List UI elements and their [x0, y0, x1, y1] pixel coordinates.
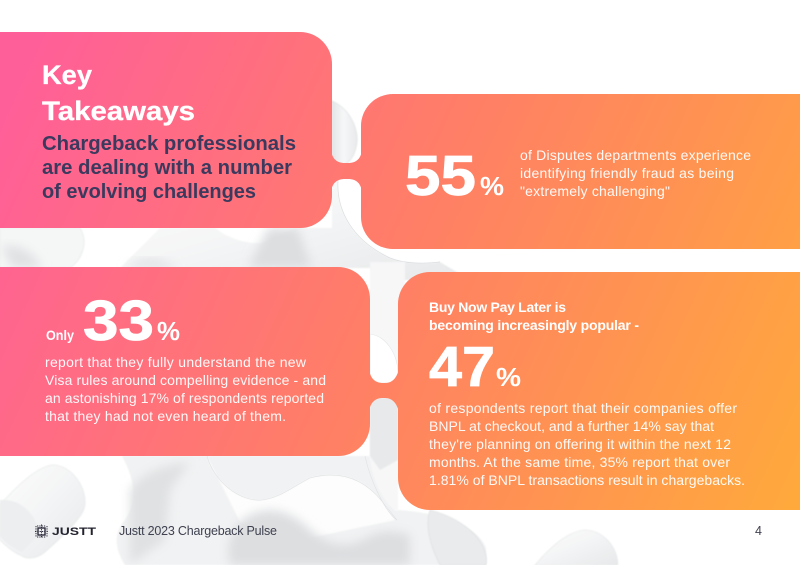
stat: 55%: [405, 144, 504, 208]
shape: central band: [120, 180, 470, 280]
stat: 47%: 47: [429, 335, 495, 399]
text: BNPL details: 1.81% of BNPL transactions result in chargebacks.: [429, 472, 745, 488]
text: BNPL details: months. At the same time, 35% report that over: [429, 454, 730, 470]
text: friendly fraud: "extremely challenging": [520, 183, 670, 199]
panel: 47 percent stat: [398, 272, 800, 510]
text: friendly fraud: identifying friendly fraud as being: [520, 165, 734, 181]
text: BNPL details: of respondents report that their companies offer: [429, 400, 737, 416]
page number: 4: [755, 524, 762, 538]
text: Buy Now Pay Later: [429, 299, 639, 333]
shape: centre gutter: [370, 262, 405, 510]
text: Visa rules: an astonishing 17% of respondents reported: [45, 390, 324, 406]
footer title: Justt 2023 Chargeback Pulse: [119, 524, 277, 538]
heading: Key Takeaways: Takeaways: [42, 96, 195, 126]
logo wordmark: JUSTT: [52, 526, 96, 538]
connector: top panels: [331, 150, 362, 192]
text: Visa rules: that they had not even heard of them.: [45, 408, 286, 424]
subheading: evolving challenges: [42, 133, 296, 203]
subheading: evolving challenges: of evolving challenges: [42, 181, 256, 203]
text: friendly fraud: [520, 147, 751, 199]
stat: Only 33%: [46, 289, 180, 353]
shape: bottom right cylinder: [535, 530, 618, 565]
connector: lower panels: [369, 369, 399, 412]
text: friendly fraud: of Disputes departments experience: [520, 147, 751, 163]
stat: Only 33%: 33: [83, 289, 154, 353]
shape: bottom centre ribbon: [117, 456, 486, 565]
text: Buy Now Pay Later: Buy Now Pay Later is: [429, 299, 566, 315]
shape: upper left disc: [0, 228, 84, 268]
icon: Justt logo mark: [35, 524, 48, 538]
stat: 47%: [429, 335, 521, 399]
text: Visa rules: report that they fully understand the new: [45, 354, 307, 370]
shape: top disc: [330, 100, 357, 164]
background: translucent white 3D shapes: [0, 100, 618, 565]
heading: Key Takeaways: [42, 60, 195, 126]
stat: 55%: %: [480, 171, 504, 201]
subheading: evolving challenges: Chargeback professionals: [42, 133, 296, 155]
stat: Only 33%: %: [157, 316, 180, 346]
text: BNPL details: BNPL at checkout, and a further 14% say that: [429, 418, 714, 434]
shape: bottom left cylinder: [0, 465, 85, 558]
subheading: evolving challenges: are dealing with a number: [42, 157, 292, 179]
text: Buy Now Pay Later: becoming increasingly popular -: [429, 317, 639, 333]
footer: [35, 524, 762, 538]
text: BNPL details: they're planning on offering it within the next 12: [429, 436, 731, 452]
text: BNPL details: [429, 400, 745, 488]
heading: Key Takeaways: Key: [42, 60, 92, 90]
panel: key takeaways heading: [0, 32, 332, 228]
text: Visa rules: [45, 354, 326, 424]
stat: 47%: %: [496, 362, 521, 392]
stat: Only 33%: Only: [46, 327, 74, 343]
stat: 55%: 55: [405, 144, 476, 208]
text: Visa rules: Visa rules around compelling evidence - and: [45, 372, 326, 388]
panel: 33 percent stat: [0, 267, 370, 456]
panel: 55 percent stat: [361, 94, 800, 249]
